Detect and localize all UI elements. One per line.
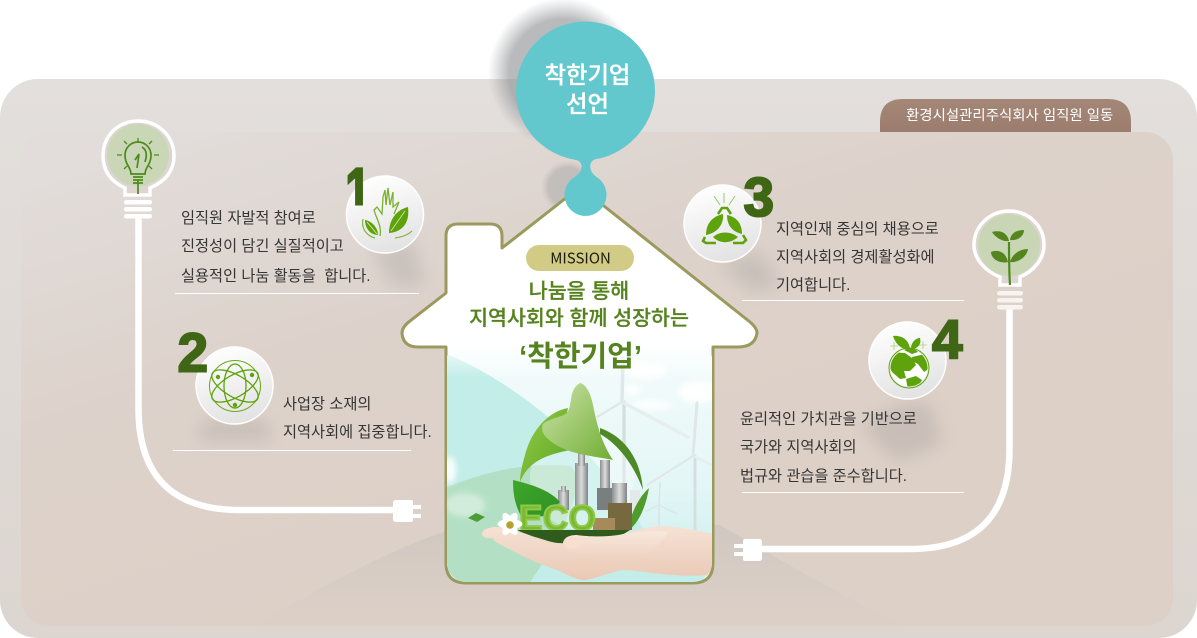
text block 3: 지역사회의 경제활성화에 [776,249,935,266]
divider 2 [173,450,411,451]
teal drop badge [516,22,655,216]
number 1: 1 [345,155,371,228]
text block 3: 기여합니다. [776,277,850,294]
soft top fade [447,340,712,372]
section 3: local hiring [684,166,964,301]
section 2: local community [173,322,432,451]
right cable with bulb and plug [734,211,1044,561]
badge title: 선언 [566,91,609,117]
number 4: 4 [932,308,963,370]
badge title [545,62,630,117]
text block 2 [283,396,432,441]
thumb nail [564,537,582,549]
mission statement: ‘착한기업’ [519,340,642,373]
tab: company staff signature: 환경시설관리주식회사 임직원 일동 [906,107,1113,124]
text block 3 [776,221,939,294]
drop shape [516,22,655,216]
icon disc 3: recycling leaves [684,185,761,262]
tray [517,530,630,543]
cable left [138,217,395,510]
buildings [558,452,640,515]
teal hill [447,354,712,582]
text block 1: 임직원 자발적 참여로 [181,210,316,227]
number 2: 2 [178,322,208,384]
right leaf [632,488,649,528]
wood blocks [593,503,632,530]
text block 4: 윤리적인 가치관을 기반으로 [740,411,917,428]
divider 1 [175,293,419,294]
mission pill [526,245,634,271]
house outline [402,187,757,583]
mission statement: 지역사회와 함께 성장하는 [469,307,689,330]
icon shadow 4 [860,402,942,462]
icon disc 4: globe with sprout [869,322,946,399]
plug left [393,500,421,522]
text block 1 [181,210,371,285]
divider 4 [742,492,964,493]
icon shadow 1 [372,238,425,285]
thumb [563,531,668,544]
hand [482,526,712,580]
number 3: 3 [744,166,774,228]
text block 4: 국가와 지역사회의 [740,439,856,456]
text block 4 [740,411,917,485]
icon shadow 3 [718,252,782,292]
mission statement: 나눔을 통해 [529,280,629,303]
clouds [444,361,718,517]
glass dome [530,450,632,530]
text block 1: 진정성이 담긴 실질적이고 [181,238,344,255]
lower leaf [513,480,560,518]
vine leaf back [520,408,570,482]
icon disc 1: hand and leaves [346,176,424,253]
left cable with bulb and plug [103,121,421,522]
panel: inner background [21,132,1173,626]
text block 4: 법규와 관습을 준수합니다. [740,468,907,485]
mission pill: MISSION [550,248,611,268]
text block 2: 사업장 소재의 [283,396,371,413]
section 4: ethics and law [740,308,964,493]
daisy [498,512,522,536]
tab: company staff signature [880,99,1131,132]
plug right [734,539,762,561]
text block 1: 실용적인 나눔 활동을 합니다. [181,268,371,285]
icon disc 2: atom [196,347,273,424]
ECO letters: ECO [519,499,596,538]
big heart leaf [542,383,613,460]
text block 3: 지역인재 중심의 채용으로 [776,221,939,238]
mission statement [469,280,689,373]
teal shadow [488,0,638,214]
vine right [600,428,643,490]
sky background [447,340,712,582]
wind turbines [597,358,712,534]
green hill [447,465,576,582]
icon shadow 2 [198,420,272,440]
photo: hand holding eco city [444,340,718,582]
text block 2: 지역사회에 집중합니다. [283,424,432,441]
bulb right [974,211,1044,310]
badge title: 착한기업 [545,62,630,88]
bulb left [103,121,174,218]
divider 3 [742,300,964,301]
cable right [760,308,1010,549]
section 1: voluntary sharing [175,155,425,294]
small floating leaf [468,513,485,522]
background hill behind house [255,525,905,626]
